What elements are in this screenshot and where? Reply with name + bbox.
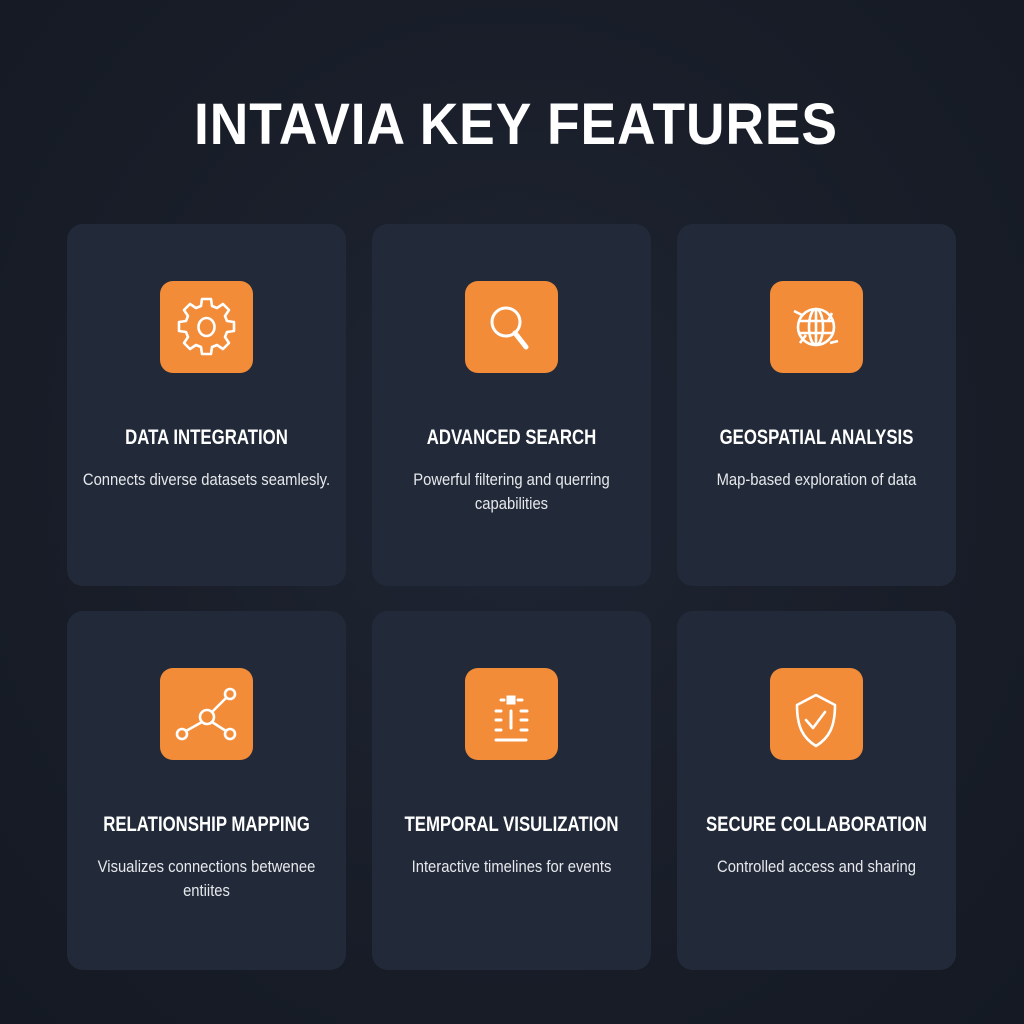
heading: TEMPORAL VISULIZATION bbox=[404, 813, 619, 836]
description bbox=[413, 470, 610, 513]
heading: ADVANCED SEARCH bbox=[427, 426, 596, 449]
icon: magnifier bbox=[465, 281, 558, 373]
heading: SECURE COLLABORATION bbox=[706, 813, 927, 836]
description: Interactive timelines for events bbox=[412, 857, 611, 876]
description: Controlled access and sharing bbox=[717, 857, 916, 876]
panel: relationship mapping bbox=[67, 611, 346, 970]
icon: gear bbox=[160, 281, 253, 373]
description: Map-based exploration of data bbox=[717, 470, 916, 489]
heading: RELATIONSHIP MAPPING bbox=[103, 813, 310, 836]
icon: timeline bbox=[465, 668, 558, 760]
heading: DATA INTEGRATION bbox=[125, 426, 288, 449]
description: entiites bbox=[183, 881, 230, 900]
description: Visualizes connections betwenee bbox=[98, 857, 315, 876]
description: Powerful filtering and querring bbox=[413, 470, 610, 489]
panel: data integration bbox=[67, 224, 346, 586]
icon: globe bbox=[770, 281, 863, 373]
panel: temporal visualization bbox=[372, 611, 651, 970]
description: Connects diverse datasets seamlesly. bbox=[83, 470, 330, 489]
panel: secure collaboration bbox=[677, 611, 956, 970]
icon: shield bbox=[770, 668, 863, 760]
icon: network bbox=[160, 668, 253, 760]
heading: GEOSPATIAL ANALYSIS bbox=[720, 426, 913, 449]
panel: advanced search bbox=[372, 224, 651, 586]
description: capabilities bbox=[475, 494, 548, 513]
panel: geospatial analysis bbox=[677, 224, 956, 586]
description bbox=[98, 857, 315, 900]
title: INTAVIA KEY FEATURES bbox=[194, 92, 838, 157]
